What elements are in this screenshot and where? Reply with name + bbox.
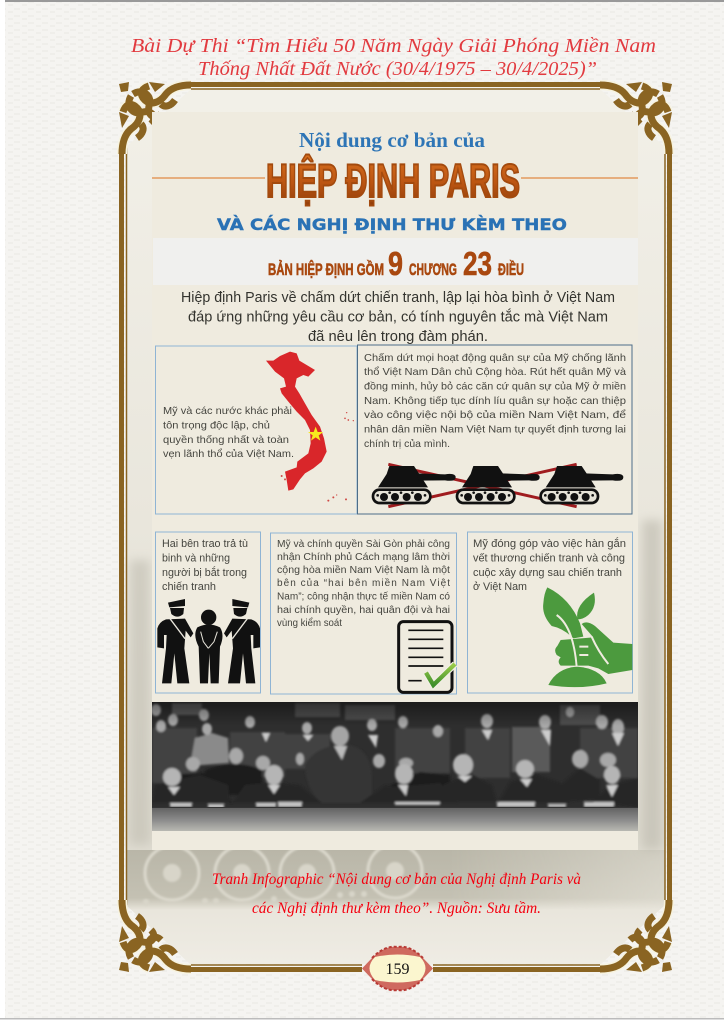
band: 9 chuong 23 dieu	[153, 238, 638, 285]
text: prisoners: người bị bắt trong	[162, 566, 247, 579]
icon: vietnam map	[266, 352, 354, 502]
band: 9 chuong 23 dieu: BẢN HIỆP ĐỊNH GỒM	[268, 260, 384, 279]
intro text: đáp ứng những yêu cầu cơ bản, có tính nguyên tắc mà Việt Nam	[188, 308, 608, 326]
panel: prisoners exchange	[156, 532, 260, 693]
text: healing: cuộc xây dựng sau chiến tranh	[473, 567, 622, 579]
text: recognition: Nam”; công nhận thực tế miền Nam có	[277, 590, 450, 602]
text: recognition: Mỹ và chính quyền Sài Gòn phải công	[277, 538, 450, 550]
icon: guards and prisoner	[157, 599, 260, 683]
text: prisoners	[162, 538, 248, 593]
text: end of military activity: vào công việc nội bộ của miền Nam Việt Nam, để	[364, 409, 626, 421]
text: sovereignty: tôn trọng độc lập, chủ	[163, 420, 270, 432]
icon: crossed-out tanks	[372, 464, 623, 507]
heading: noi dung: Nội dung cơ bản của	[299, 128, 485, 152]
text: recognition: hai chính quyền, hai quân đội và hai	[277, 604, 450, 616]
text: healing	[473, 537, 626, 593]
heading rule	[152, 177, 638, 179]
page number badge	[362, 947, 433, 990]
icon: hand holding plant	[543, 587, 632, 687]
caption	[212, 871, 581, 917]
page number badge: 159	[386, 961, 410, 978]
text: end of military activity	[364, 352, 626, 450]
text: end of military activity: nhân dân miền Nam Việt Nam tự quyết định tương lai	[364, 424, 626, 436]
band: 9 chuong 23 dieu: 23	[463, 245, 492, 282]
text: sovereignty: quyền thống nhất và toàn	[163, 434, 289, 446]
caption: Tranh Infographic “Nội dung cơ bản của Nghị định Paris và	[212, 871, 581, 888]
intro text: đã nêu lên trong đàm phán.	[308, 328, 488, 345]
photo: signing ceremony	[151, 702, 638, 831]
text: recognition: vùng kiểm soát	[277, 617, 342, 629]
text: prisoners: Hai bên trao trả tù	[162, 538, 248, 550]
text: healing: vết thương chiến tranh và công	[473, 552, 625, 564]
ornamental border	[119, 82, 672, 972]
band: 9 chuong 23 dieu: ĐIỀU	[498, 260, 524, 279]
panel: healing war wounds	[468, 532, 632, 693]
caption: các Nghị định thư kèm theo”. Nguồn: Sưu tầm.	[252, 900, 541, 917]
frame interior with faded background	[126, 90, 665, 964]
text: healing: Mỹ đóng góp vào việc hàn gắn	[473, 537, 626, 550]
text: end of military activity: Nam. Không tiếp tục dính líu quân sự hoặc can thiệp	[364, 395, 626, 407]
text: sovereignty: Mỹ và các nước khác phải	[163, 405, 292, 417]
header title: Bài Dự Thi “Tìm Hiểu 50 Năm Ngày Giải Phóng Miền Nam	[131, 35, 656, 57]
panel: sovereignty map	[156, 346, 357, 514]
band: 9 chuong 23 dieu: 9	[388, 245, 403, 282]
text: recognition: nhận Chính phủ Cách mạng lâm thời	[277, 551, 450, 563]
header title	[131, 35, 656, 80]
intro text: Hiệp định Paris về chấm dứt chiến tranh, lập lại hòa bình ở Việt Nam	[181, 289, 615, 306]
text: end of military activity: chính trị của mình.	[364, 438, 450, 450]
subheading: VÀ CÁC NGHỊ ĐỊNH THƯ KÈM THEO	[217, 215, 567, 234]
text: sovereignty: vẹn lãnh thổ của Việt Nam.	[163, 448, 294, 460]
panel: recognition of provisional government	[270, 533, 456, 694]
header title: Thống Nhất Đất Nước (30/4/1975 – 30/4/2025)”	[198, 58, 597, 80]
text: prisoners: chiến tranh	[162, 581, 216, 593]
intro text	[181, 289, 615, 345]
faded tank background	[127, 850, 664, 908]
text: recognition: cộng hòa miền Nam Việt Nam là một	[277, 564, 450, 576]
heading: hiep dinh paris: HIỆP ĐỊNH PARIS	[266, 154, 520, 207]
icon: document with check	[399, 622, 455, 692]
band: 9 chuong 23 dieu: CHƯƠNG	[409, 260, 457, 279]
text: end of military activity: thổ Việt Nam Dân chủ Cộng hòa. Rút hết quân Mỹ và	[364, 366, 626, 378]
text: recognition: bên của “hai bên miền Nam Việt	[277, 577, 450, 589]
text: end of military activity: đồng minh, hủy bỏ các căn cứ quân sự của Mỹ ở miền	[364, 380, 626, 392]
panel: end of military activity	[358, 345, 632, 514]
text: recognition	[277, 538, 450, 629]
text: end of military activity: Chấm dứt mọi hoạt động quân sự của Mỹ chống lãnh	[364, 352, 626, 364]
text: sovereignty	[163, 405, 294, 460]
text: prisoners: binh và những	[162, 552, 230, 564]
text: healing: ở Việt Nam	[473, 581, 527, 593]
infographic panel	[152, 112, 638, 850]
